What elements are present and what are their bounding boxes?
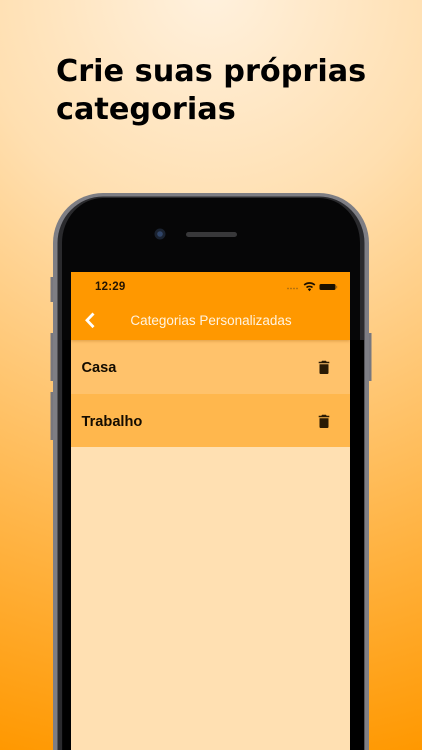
back arrow	[85, 312, 94, 328]
row: Trabalho	[71, 394, 350, 447]
title	[56, 54, 366, 127]
phone side buttons	[50, 277, 372, 440]
row: Casa	[71, 340, 350, 394]
phone body	[53, 193, 369, 750]
icon: trash	[318, 360, 330, 374]
title: Crie suas próprias	[56, 54, 366, 89]
header bar	[71, 272, 350, 340]
title: categorias	[56, 92, 236, 127]
screen title: Categorias Personalizadas	[130, 313, 292, 328]
label: Trabalho	[82, 414, 142, 430]
status icons	[287, 282, 338, 292]
status time: 12:29	[95, 281, 125, 293]
icon: trash	[318, 414, 330, 428]
speaker	[186, 232, 237, 237]
label: Casa	[82, 360, 116, 376]
front camera	[154, 228, 166, 240]
app screen	[71, 272, 350, 750]
